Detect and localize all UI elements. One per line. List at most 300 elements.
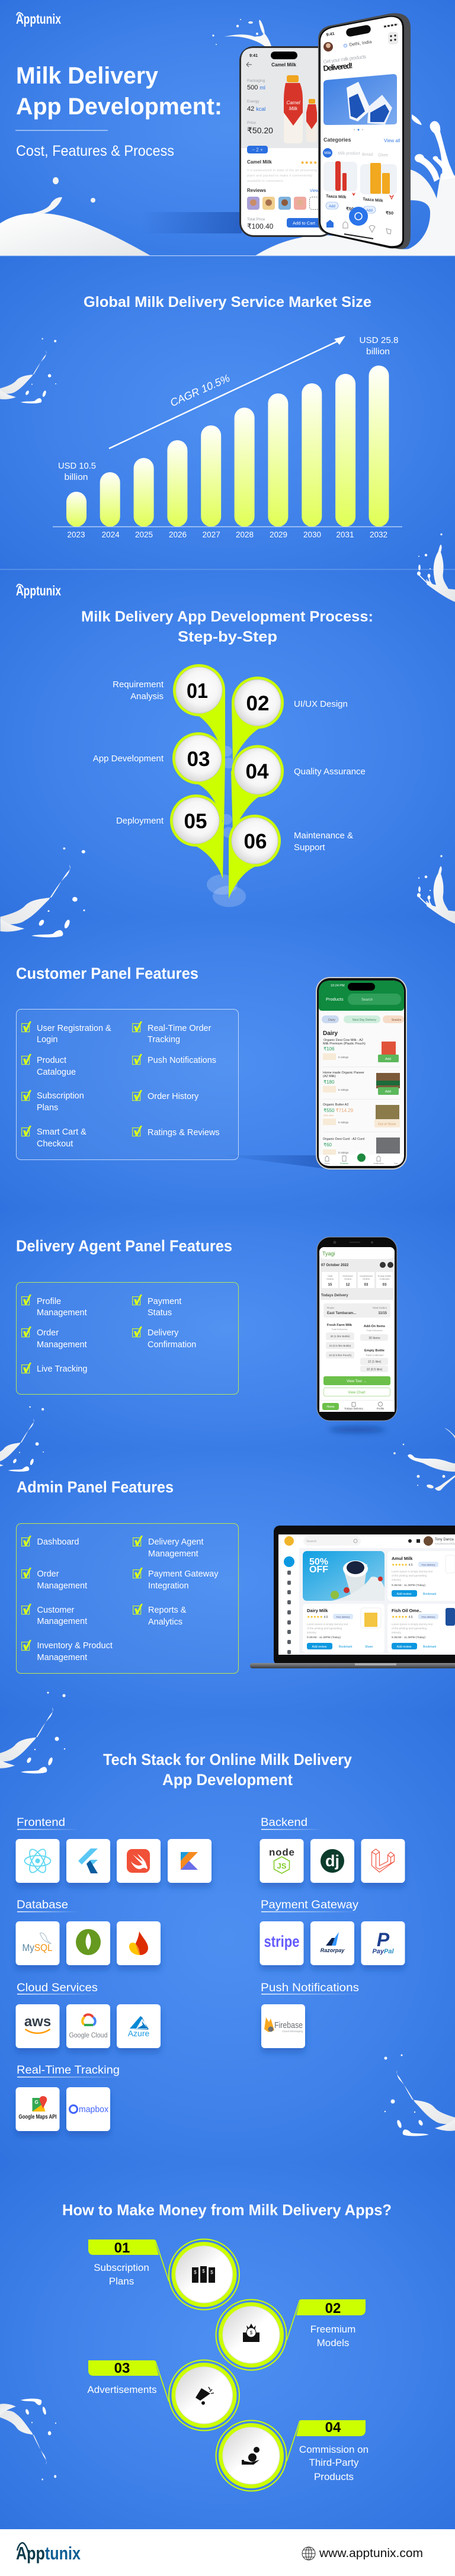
card: MySQL: [15, 1921, 59, 1965]
phone: delivery agent app: Delivered: [343, 1274, 353, 1277]
phone: delivery agent app: 10 (0.5 litre): [367, 1368, 383, 1372]
milk splash: right swirl: [255, 114, 455, 256]
icon: freemium: [243, 2324, 259, 2342]
year labels: 2032: [370, 530, 387, 539]
splash left: [0, 1692, 65, 1773]
card: Google Cloud: [66, 2004, 110, 2048]
panel: delivery agent features: [17, 1282, 238, 1395]
group: Real-Time Tracking: [15, 2064, 124, 2131]
phone: delivery agent app: 30 Items: [369, 1337, 380, 1340]
pin 06: 06: [244, 830, 267, 853]
phone: delivery agent app: Fresh Farm Milk: [327, 1324, 353, 1327]
label: CAGR: CAGR 10.5%: [168, 372, 232, 409]
section: delivery agent panel: [0, 1209, 455, 1472]
phone: delivery agent app: View Chart: [348, 1391, 366, 1395]
pin 03: [172, 732, 225, 826]
card: Azure: Azure: [128, 2029, 149, 2038]
panel: customer features: Catalogue: [37, 1068, 76, 1077]
group: Real-Time Tracking: Real-Time Tracking: [17, 2064, 120, 2077]
panel: delivery agent features: Profile: [37, 1297, 61, 1306]
phone: front, home screen: Ghee: [378, 153, 388, 158]
panel: admin features: Integration: [148, 1581, 189, 1591]
product card: Dairy Milk: Lorem Ipsum is simply dummy text: [307, 1623, 348, 1626]
splash remains right: [417, 855, 455, 924]
phone: back, product details: 9:41: [249, 54, 258, 58]
panel: delivery agent features: Confirmation: [148, 1340, 196, 1350]
year labels: 2024: [102, 530, 120, 539]
phone: customer app: Out of Stock: [378, 1123, 396, 1126]
product card: Dairy Milk: [303, 1604, 384, 1653]
card: PayPal: PayPal: [372, 1948, 394, 1955]
pin 01: [173, 664, 225, 764]
phone: delivery agent app: Home: [326, 1405, 335, 1409]
step labels: Maintenance &: [294, 831, 353, 841]
icon: megaphone: [196, 2387, 214, 2405]
phone: delivery agent app: Total Orders: [372, 1306, 387, 1309]
pin 03: 03: [187, 748, 210, 771]
phone: delivery agent app: 30 (1 litre Bottle): [330, 1335, 350, 1338]
icon: freemium: $: [250, 2330, 253, 2335]
label: end value: [359, 335, 398, 357]
group: Backend: Backend: [261, 1816, 307, 1829]
year labels: 2030: [303, 530, 321, 539]
step 01: 01: [114, 2240, 130, 2256]
card: Node.js: JS: [277, 1861, 287, 1870]
logo: Apptunix: [16, 11, 61, 27]
group: Database: Database: [17, 1899, 68, 1911]
section: hero: [0, 0, 455, 256]
panel: admin features: Management: [148, 1549, 198, 1559]
group: Cloud Services: Cloud Services: [17, 1982, 98, 1994]
step 03: [87, 2360, 239, 2430]
subtitle: Cost, Features & Process: [16, 143, 174, 159]
panel: customer features: Smart Cart &: [37, 1127, 86, 1137]
product card: Fish Oil: Free delivery: [421, 1615, 435, 1619]
panel: customer features: User Registration &: [37, 1024, 111, 1033]
phone: customer app: Add: [385, 1058, 391, 1061]
phone: delivery agent app: 07 October 2022: [321, 1264, 349, 1267]
step 02: Models: [317, 2337, 349, 2348]
phone shadow: [329, 1427, 386, 1433]
step 01: Subscription: [94, 2262, 149, 2273]
milk splash: top behind phones: [212, 19, 271, 46]
phone: delivery agent app: 10 (0.5 litre Bottle): [329, 1344, 351, 1347]
phone: customer app: ₹106: [323, 1046, 335, 1052]
product card: Fish Oil: industry.: [392, 1631, 402, 1634]
phone: delivery agent app: Orders: [344, 1277, 351, 1280]
milk splash: left: [0, 1406, 44, 1472]
phone: delivery agent app: Total Deliveries: [331, 1328, 348, 1331]
phone: customer app: Search: [361, 998, 373, 1002]
product card: Amul Milk: Bookmark: [423, 1593, 437, 1596]
product card: Amul Milk: 9.30AM - 11.30PM (Today): [392, 1584, 425, 1587]
group: Database: [15, 1899, 161, 1965]
card: Google Maps API: Google Maps API: [19, 2114, 57, 2120]
phone: customer app: ₹550 ₹714.29: [323, 1108, 354, 1113]
step 04: [216, 2420, 369, 2491]
pin shadows: [207, 746, 246, 907]
group: Frontend: Frontend: [17, 1816, 65, 1829]
phone: customer app: ₹60: [323, 1142, 332, 1148]
phone: delivery agent app: Collected: [380, 1277, 389, 1280]
section: process: [0, 533, 455, 937]
product card: Amul Milk: Lorem Ipsum is simply dummy text: [392, 1570, 433, 1573]
heading: Delivery Agent Panel Features: [16, 1237, 232, 1255]
icon: subscription files: $: [210, 2270, 213, 2275]
label: end value: USD 25.8: [359, 335, 398, 345]
panel: admin features: Management: [37, 1617, 87, 1626]
group: Payment Gateway: [259, 1899, 405, 1965]
milk splash: top right: [393, 1428, 455, 1491]
heading: Step-by-Step: [178, 629, 277, 645]
section: admin panel: [0, 1406, 455, 1773]
year labels: [67, 530, 387, 539]
section: tech stack: [0, 1692, 455, 2163]
phone: back, product details: Total Price: [247, 217, 265, 222]
phone: back, product details: Camel Milk: [247, 159, 272, 165]
phone: back, product details: Packaging: [247, 79, 265, 83]
product card: Fish Oil: Fish Oil Ome..: [392, 1608, 421, 1613]
product card: Fish Oil: Lorem Ipsum is simply dummy text: [392, 1623, 433, 1626]
arrow: growth: [109, 336, 345, 448]
phone: customer app: Next Day Delivery: [353, 1018, 377, 1022]
icon: globe: [302, 2547, 315, 2560]
phone shadow: [219, 1155, 332, 1170]
panel: admin features: Dashboard: [37, 1537, 79, 1547]
icon: subscription files: [192, 2266, 215, 2283]
title: [16, 63, 222, 120]
product card: Dairy Milk: 9.30AM - 11.30PM (Today): [307, 1636, 341, 1639]
panel: admin features: Inventory & Product: [37, 1641, 113, 1651]
card: React: [15, 1839, 59, 1883]
phone: customer app: ₹180: [323, 1079, 335, 1085]
pin 02: [232, 677, 284, 761]
phone: delivery agent app: East Tambaram...: [327, 1312, 357, 1315]
milk splash: left: [0, 338, 56, 403]
heading: How to Make Money from Milk Delivery Apps?: [62, 2201, 392, 2219]
heading: Tech Stack for Online Milk Delivery: [103, 1751, 352, 1768]
bottle: large: [284, 75, 303, 143]
product card: Fish Oil: 9.30AM - 11.30PM (Today): [392, 1636, 425, 1639]
panel: admin features: Reports &: [148, 1606, 187, 1615]
phone: customer app: Organic Desi Curd - A2 Curd: [323, 1138, 364, 1141]
product card: Fish Oil: Add review: [397, 1645, 412, 1649]
section: market size: [0, 255, 455, 569]
phone: back, product details: Camel Milk: [271, 62, 296, 68]
product card: Fish Oil: ★★★★★ 4.5: [392, 1615, 413, 1619]
card: Stripe: [259, 1921, 303, 1965]
phone: delivery agent app: Profile: [377, 1407, 384, 1410]
step labels: Analysis: [130, 691, 164, 701]
phone: front, home screen: Get your milk products: [323, 53, 367, 65]
step labels: [93, 680, 366, 853]
panel: delivery agent features: Status: [148, 1308, 172, 1318]
product card: Amul Milk: Free delivery: [421, 1563, 435, 1566]
phone: back, product details: ₹50.20: [247, 126, 273, 135]
phone: customer app: Home: [324, 1162, 330, 1165]
bottle: large: Milk: [289, 106, 298, 111]
promo card: [303, 1551, 384, 1601]
heading: Customer Panel Features: [16, 965, 198, 982]
step 01: Plans: [109, 2276, 134, 2287]
phone: delivery agent app: 15: [328, 1283, 332, 1287]
year labels: 2027: [203, 530, 220, 539]
laptop: admin dashboard: [250, 1526, 455, 1668]
phone: customer app: Dairy: [323, 1030, 338, 1037]
card: PayPal: [361, 1921, 405, 1965]
phone: delivery agent app: Empty Bottle: [364, 1349, 384, 1353]
heading: Milk Delivery App Development Process:: [81, 608, 373, 625]
promo card: 50%: [309, 1557, 328, 1567]
phone: delivery agent app: 03: [364, 1283, 369, 1287]
product card: Dairy Milk: Dairy Milk: [307, 1608, 328, 1613]
footer: [0, 2529, 455, 2576]
step 04: 04: [325, 2420, 341, 2436]
panel: customer features: Ratings & Reviews: [148, 1128, 220, 1138]
card: Node.js: node: [269, 1847, 294, 1858]
card: Google Maps API: G: [34, 2100, 39, 2105]
phone: delivery agent app: Todays Delivery: [344, 1407, 364, 1410]
title: Milk Delivery: [16, 63, 159, 89]
phone: delivery agent app: 10 (0.5 litre Pouch): [329, 1354, 352, 1357]
step 01: [88, 2239, 239, 2309]
heading: Admin Panel Features: [17, 1478, 174, 1496]
milk splash: bottom left: [0, 1692, 65, 1773]
card: Firebase: [117, 1921, 161, 1965]
product card: Fish Oil: [387, 1604, 455, 1653]
phone: back, product details: Add to Cart: [293, 220, 316, 226]
heading: [103, 1751, 352, 1789]
card: Django: [310, 1839, 354, 1883]
milk splash: right: [384, 2055, 455, 2136]
product card: Dairy Milk: ★★★★★ 4.5: [307, 1615, 328, 1619]
bottle: large: Camel: [286, 100, 300, 105]
phone: back, product details: It is pasteurized in state of the art processing: [247, 169, 317, 172]
panel: customer features: Real-Time Order: [148, 1024, 212, 1033]
product card: Amul Milk: industry.: [392, 1578, 402, 1581]
year labels: 2028: [236, 530, 254, 539]
phone: delivery agent app: Empty Bottle: [378, 1274, 392, 1277]
promo card: OFF: [309, 1565, 328, 1575]
step 02: 02: [325, 2301, 341, 2317]
phone: customer app: Milk Premium (Plastic Pouch): [323, 1042, 366, 1046]
step 03: Advertisements: [87, 2384, 157, 2395]
panel: admin features: Payment Gateway: [148, 1569, 219, 1579]
phone: delivery agent app: Orders: [326, 1277, 334, 1280]
phone: customer app: Organic Butter A2: [323, 1103, 348, 1107]
step 04: Products: [314, 2471, 354, 2482]
card: Google Maps API: [15, 2087, 59, 2131]
heading: [81, 608, 373, 645]
icon: commission: [242, 2447, 259, 2465]
phone: customer app: Home made Organic Paneer: [323, 1071, 364, 1075]
year labels: 2025: [135, 530, 153, 539]
step labels: Requirement: [113, 680, 164, 690]
phone: back, product details: Price: [247, 121, 256, 125]
phone: delivery agent app: 12 (1 litre): [368, 1360, 382, 1364]
phone: back, product details: available to consumers.: [247, 180, 284, 183]
label: start value: billion: [64, 472, 88, 482]
card: Mapbox: mapbox: [79, 2104, 108, 2114]
panel: admin features: [17, 1524, 238, 1673]
phone: customer app: Add: [385, 1090, 391, 1094]
milk splash: top right: [417, 533, 455, 602]
step 04: Commission on: [299, 2444, 369, 2455]
phone: delivery agent app: Tyagi: [322, 1251, 335, 1257]
card: Firebase Cloud Messaging: Cloud Messaging: [282, 2030, 303, 2033]
footer logo: Apptunix: [16, 2543, 81, 2564]
section: customer panel: [0, 847, 455, 1209]
panel: customer features: Subscription: [37, 1091, 84, 1101]
heading: Global Milk Delivery Service Market Size: [84, 294, 371, 310]
panel: admin features: Order: [37, 1569, 59, 1579]
product card: Fish Oil: of the printing and typesetting: [392, 1627, 427, 1630]
step 03: 03: [114, 2360, 130, 2376]
panel: admin features: Management: [37, 1581, 87, 1591]
phone: customer app: 10:24 PM: [331, 984, 345, 988]
product card: Fish Oil: Bookmark: [423, 1645, 437, 1649]
step labels: Quality Assurance: [294, 767, 366, 777]
step 02: [216, 2299, 366, 2370]
product card: Dairy Milk: of the printing and typesetting: [307, 1627, 342, 1630]
phone: back, product details: Energy: [247, 100, 259, 104]
panel: customer features: Plans: [37, 1103, 58, 1113]
panel: customer features: Push Notifications: [148, 1056, 216, 1065]
phone: back, product details: View: [310, 189, 319, 193]
step labels: App Development: [93, 754, 164, 764]
milk splash: bottom left: [0, 847, 85, 937]
phone: customer app: Organic Desi Cow Milk - A2: [323, 1039, 363, 1042]
card: Django: dj: [325, 1852, 339, 1870]
panel: delivery agent features: Delivery: [148, 1328, 179, 1338]
phone: delivery agent app: Total Collected: [366, 1354, 383, 1357]
phone: customer app: Products: [340, 1162, 348, 1165]
step 02: Freemium: [310, 2324, 355, 2335]
phone: customer app: 5 ratings: [338, 1151, 349, 1154]
heading: App Development: [162, 1771, 293, 1789]
pin 06: [229, 815, 281, 899]
product card: Dairy Milk: industry.: [307, 1631, 317, 1634]
card: Laravel: [361, 1839, 405, 1883]
phone: back, product details: ★★★★: [300, 160, 318, 165]
group: Push Notifications: [261, 1982, 359, 2048]
icon: subscription files: $: [194, 2270, 197, 2275]
card: PayPal: P: [377, 1929, 390, 1950]
phone: front, home screen: Add: [329, 205, 335, 209]
phone: delivery agent app: Total: [328, 1274, 332, 1277]
product card: Amul Milk: of the printing and typesetting: [392, 1574, 427, 1577]
label: end value: billion: [366, 347, 390, 357]
card: Flutter: [66, 1839, 110, 1883]
step labels: UI/UX Design: [294, 699, 348, 709]
phone: delivery agent app: 11/15: [378, 1312, 387, 1315]
phone: delivery agent app: 03: [383, 1283, 387, 1287]
phone: customer app: 5 ratings: [338, 1121, 349, 1124]
phone: delivery agent app: Route: [327, 1306, 335, 1309]
phone: customer app: 33% offer: [323, 1114, 334, 1117]
phone: front, home screen: Add: [366, 209, 373, 213]
phone: front, home screen: Taaza Milk: [363, 197, 383, 203]
phone: front, home screen: View all: [384, 138, 400, 143]
panel: customer features: Product: [37, 1056, 66, 1065]
phone: front, home screen: Bread: [362, 153, 373, 157]
panel: customer features: Login: [37, 1035, 57, 1045]
logo: Apptunix: [16, 583, 61, 598]
group: Frontend: [15, 1816, 212, 1883]
label: start value: USD 10.5: [58, 461, 96, 471]
card: Razorpay: Razorpay: [321, 1947, 345, 1953]
phone: customer app: Products: [326, 997, 344, 1002]
product card: Dairy Milk: Add review: [312, 1645, 327, 1649]
phone: delivery agent app: Undelivered: [360, 1274, 373, 1277]
phone: customer app: 5 ratings: [338, 1056, 349, 1059]
panel: customer features: Tracking: [148, 1035, 180, 1045]
phone: customer app: [316, 977, 407, 1170]
panel: customer features: Order History: [148, 1092, 199, 1101]
phone: customer app: Notification: [373, 1162, 384, 1165]
step 04: Third-Party: [309, 2457, 359, 2468]
card: Google Cloud: Google Cloud: [69, 2031, 108, 2039]
card: Razorpay: [310, 1921, 354, 1965]
panel: admin features: Customer: [37, 1606, 75, 1615]
milk splash: bottom right: [417, 855, 455, 924]
phone: delivery agent app: [317, 1237, 397, 1421]
pin 05: [170, 794, 224, 879]
panel: customer features: [17, 1010, 238, 1160]
panel: delivery agent features: Management: [37, 1340, 87, 1350]
group: Backend: [259, 1816, 405, 1883]
phone: back, product details: Reviews: [247, 188, 267, 193]
group: Cloud Services: [15, 1982, 161, 2048]
phone: delivery agent app: Total Deliveries: [366, 1329, 383, 1332]
phone: back, product details: [239, 46, 334, 237]
process pins: [170, 664, 284, 899]
panel: delivery agent features: Order: [37, 1328, 59, 1338]
card: Azure: [117, 2004, 161, 2048]
title: App Development:: [16, 94, 222, 120]
pin 02: 02: [246, 692, 269, 715]
phone: front, home screen: 9:41: [326, 32, 335, 37]
card: AWS: aws: [24, 2014, 51, 2030]
phone: front, home screen: Delivered!: [323, 61, 353, 73]
phone: customer app: Snacks: [392, 1018, 402, 1022]
card: Node.js: [259, 1839, 303, 1883]
panel: admin features: Management: [37, 1653, 87, 1662]
phone: back, product details: − 2 +: [252, 147, 263, 153]
product card: Amul Milk: [387, 1551, 455, 1601]
card: Mapbox: [66, 2087, 110, 2131]
card: Kotlin: [168, 1839, 212, 1883]
phone: back, product details: 500 ml: [247, 84, 265, 91]
phone: customer app: 5 ratings: [338, 1088, 349, 1091]
group: Push Notifications: Push Notifications: [261, 1982, 359, 1994]
phone: delivery agent app: View Tour →: [347, 1380, 367, 1383]
phone: back, product details: ₹100.40: [247, 222, 274, 230]
splash remains: [0, 847, 85, 937]
bar chart: [53, 366, 402, 539]
phone: customer app: Cart: [394, 1162, 398, 1165]
product card: Dairy Milk: Bookmark: [339, 1645, 353, 1649]
card: AWS: [15, 2004, 59, 2048]
phone shadow: [141, 212, 242, 233]
laptop: admin dashboard: Search: [306, 1540, 316, 1543]
pin 04: 04: [245, 760, 269, 783]
phone: delivery agent app: Add-On Items: [364, 1325, 385, 1328]
step labels: Deployment: [116, 816, 164, 826]
phone: back, product details: plant and packed to make it conveniently: [247, 174, 312, 178]
panel: admin features: Analytics: [148, 1617, 182, 1627]
phone: delivery agent app: Todays Delivery: [321, 1294, 348, 1297]
